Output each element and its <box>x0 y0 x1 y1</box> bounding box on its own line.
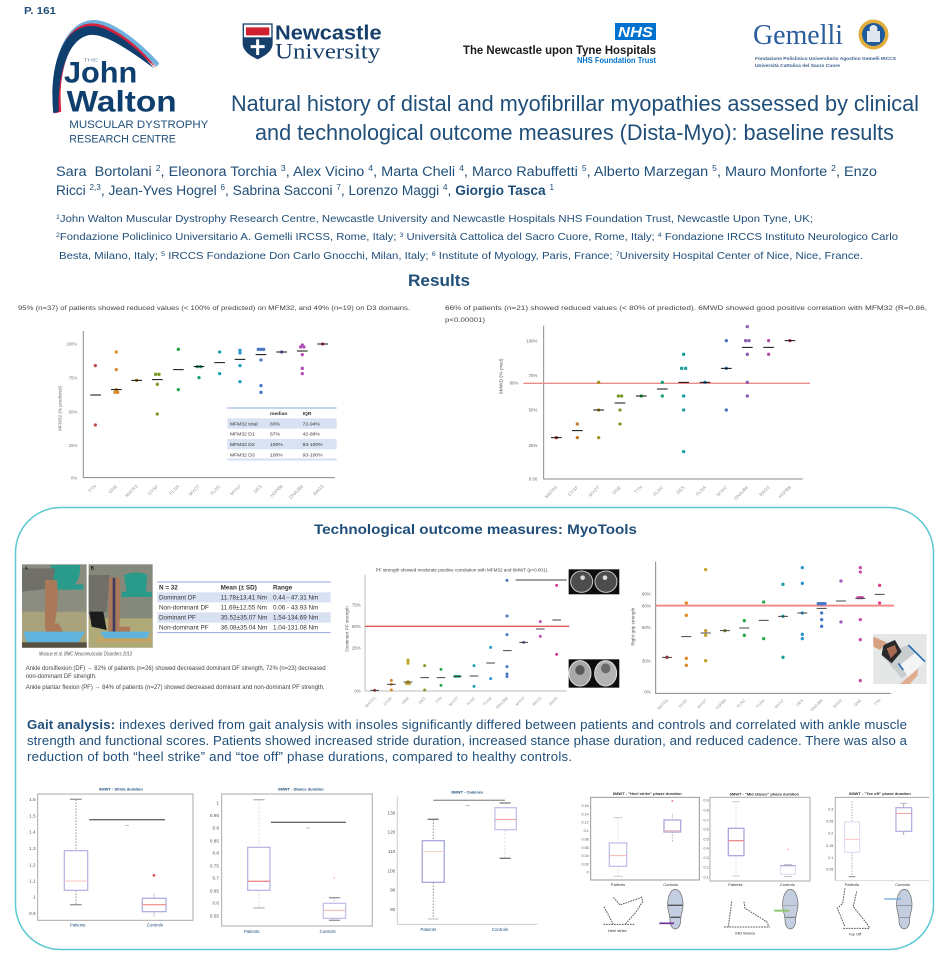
logo: John Walton Muscular Dystrophy Research Centre: RESEARCH CENTRE <box>69 133 176 145</box>
caption: photo source: Moraux et al. BMC Neuromuscular Disorders 2013 <box>39 652 132 658</box>
logo: Newcastle University <box>243 21 382 64</box>
chart: boxplot heel strike phase duration: Patients <box>611 882 625 887</box>
chart: boxplot toe off phase duration: 0.25 <box>826 819 833 823</box>
chart: grip strength by genotype: 80% <box>642 603 651 608</box>
chart: MFM32 percent predicted by genotype: FLNA <box>168 483 181 496</box>
chart: MFM32 percent predicted by genotype: 75% <box>69 375 77 380</box>
authors: , Alberto Marzegan <box>587 164 712 179</box>
chart: grip strength by genotype: TTN <box>873 698 882 707</box>
chart: boxplot stride duration: 1.1 <box>29 878 36 883</box>
table: ankle strength: Non-dominant DF <box>159 605 209 612</box>
authors: , Eleonora Torchia <box>161 164 281 179</box>
table: ankle strength: Dominant DF <box>159 595 196 602</box>
text: gait analysis: Gait analysis: indexes derived from gait analysis with insoles significantly differed between patients and controls and correlated with ankle muscle <box>27 717 907 732</box>
logo: John Walton Muscular Dystrophy Research Centre: John <box>64 56 137 89</box>
illustration: mid stance foot and insole <box>724 889 798 936</box>
chart: boxplot mid stance phase duration: Patients <box>728 882 743 887</box>
table: ankle strength: 11.69±12.55 Nm <box>221 605 267 612</box>
affiliations: 7 <box>616 251 620 258</box>
chart: dorsiflexion strength by genotype <box>344 567 569 710</box>
table: MFM32 median and IQR: median <box>270 411 287 417</box>
chart: MFM32 percent predicted by genotype: DNAJB6 <box>288 484 305 500</box>
chart: boxplot stride duration: 1.3 <box>29 846 36 851</box>
chart: boxplot cadence: 110 <box>388 849 396 854</box>
chart: boxplot stride duration: 6MWT - Stride duration <box>99 787 143 792</box>
chart: MFM32 percent predicted by genotype: FLNC <box>210 483 222 496</box>
text: gait analysis: strength and functional scores. Patients showed increased stride duration, increased stance phase duration, and reduced cadence. There was also a <box>27 733 908 748</box>
affiliations: 4 <box>658 232 662 239</box>
chart: MFM32 percent predicted by genotype: GNE <box>108 484 118 494</box>
chart: dorsiflexion strength by genotype: DYSF <box>382 695 394 707</box>
chart: grip strength by genotype <box>631 562 894 712</box>
table: ankle strength: Dominant PF <box>159 615 196 622</box>
chart: dorsiflexion strength by genotype: MATR3 <box>364 695 377 708</box>
chart: dorsiflexion strength by genotype: DES <box>417 695 427 705</box>
logo: John Walton Muscular Dystrophy Research Centre <box>52 20 208 145</box>
logo: The Newcastle upon Tyne Hospitals NHS: NHS <box>618 25 653 41</box>
logo: Gemelli: Gemelli <box>753 20 843 51</box>
affiliations: University Hospital Center of Nice, Nice, France. <box>620 250 863 262</box>
photo: handheld grip device <box>873 634 927 684</box>
authors: 2 <box>831 164 837 173</box>
chart: grip strength by genotype: DES <box>795 698 805 707</box>
chart: boxplot mid stance phase duration: Controls <box>780 882 795 887</box>
chart: boxplot stride duration: 0.9 <box>29 911 36 916</box>
chart: 6MWD percent predicted by genotype: 0.00 <box>529 477 538 482</box>
table: ankle strength: Non-dominant PF <box>159 625 209 632</box>
authors: Ricci <box>56 183 85 198</box>
authors: , Enzo <box>836 164 877 179</box>
chart: MFM32 percent predicted by genotype: BAG3 <box>312 484 325 496</box>
chart: boxplot mid stance phase duration: 0.5 <box>704 837 709 841</box>
chart: dorsiflexion strength by genotype: 75% <box>352 603 361 608</box>
text: 6MWD finding: 66% of patients (n=21) showed reduced values (< 80% of predicted). 6MWD showed good positive correlation with MFM32 (R=0.86, <box>445 305 927 312</box>
chart: boxplot stance duration <box>210 787 372 934</box>
chart: dorsiflexion strength by genotype: MYOT <box>448 695 460 707</box>
table: MFM32 median and IQR: 72-94% <box>303 421 320 427</box>
chart: boxplot cadence: 80 <box>390 907 396 912</box>
table: MFM32 median and IQR <box>227 408 337 461</box>
chart: boxplot toe off phase duration: 0.3 <box>828 807 833 811</box>
logo: Gemelli <box>753 20 896 68</box>
chart: boxplot stride duration: 1.4 <box>29 830 36 835</box>
chart: 6MWD percent predicted by genotype: 100% <box>526 338 537 343</box>
chart: MFM32 percent predicted by genotype: DES <box>253 484 263 494</box>
chart: boxplot heel strike phase duration: 0.02 <box>582 862 589 866</box>
chart: MFM32 percent predicted by genotype: 0% <box>71 475 77 480</box>
table: ankle strength: Mean (± SD) <box>221 584 257 591</box>
text: ankle strength findings: Ankle plantar flexion (PF) → 84% of patients (n=27) showed decreased dominant and non-dominant PF strength. <box>26 684 325 691</box>
affiliations: 1 <box>56 214 60 221</box>
chart: boxplot stance duration: 0.85 <box>210 838 219 843</box>
chart: 6MWD percent predicted by genotype <box>499 325 810 501</box>
chart: boxplot toe off phase duration: 0.15 <box>826 844 833 848</box>
chart: grip strength by genotype: HSPB8 <box>714 697 728 711</box>
chart: boxplot toe off phase duration: 0.2 <box>828 832 833 836</box>
authors: , Jean-Yves Hogrel <box>101 183 221 198</box>
affiliations: 3 <box>400 232 404 239</box>
chart: 6MWD percent predicted by genotype: GNE <box>611 485 622 495</box>
chart: dorsiflexion strength by genotype: DNAJB6 <box>495 695 510 710</box>
chart: MFM32 percent predicted by genotype <box>57 331 335 500</box>
authors: , Marta Cheli <box>373 164 459 179</box>
chart: 6MWD percent predicted by genotype: 80% <box>510 381 518 386</box>
chart: boxplot heel strike phase duration: Controls <box>663 882 678 887</box>
authors: 4 <box>459 164 465 173</box>
authors: Giorgio Tasca <box>455 183 549 198</box>
authors: 1 <box>549 183 555 192</box>
logo: The Newcastle upon Tyne Hospitals NHS: The Newcastle upon Tyne Hospitals <box>463 45 656 57</box>
logo: John Walton Muscular Dystrophy Research Centre: Walton <box>67 86 177 119</box>
chart: boxplot heel strike phase duration: 0.16 <box>582 804 589 808</box>
title: and technological outcome measures (Dista-Myo): baseline results <box>255 120 894 145</box>
logo: John Walton Muscular Dystrophy Research Centre: THE <box>83 57 99 63</box>
affiliations: Università Cattolica del Sacro Cuore, Rome, Italy; <box>403 231 658 243</box>
photo: ankle dorsiflexion setup A: A <box>25 566 29 571</box>
chart: dorsiflexion strength by genotype: 50% <box>352 624 361 629</box>
text: 6MWD finding <box>445 305 927 324</box>
affiliations: IRCCS Fondazione Don Carlo Gnocchi, Milan, Italy; <box>165 250 432 262</box>
chart: grip strength by genotype: DYSF <box>677 697 689 709</box>
chart: dorsiflexion strength by genotype: FLNA <box>482 695 493 706</box>
chart: boxplot cadence <box>388 789 538 932</box>
logo: The Newcastle upon Tyne Hospitals NHS: NHS Foundation Trust <box>577 56 656 65</box>
chart: grip strength by genotype: MYOT <box>696 697 708 710</box>
photo: ankle plantar flexion setup B <box>89 564 153 648</box>
text: 6MWD finding: p<0.00001) <box>445 317 485 324</box>
chart: boxplot stance duration: 0.75 <box>210 863 219 868</box>
table: ankle strength: 11.78±13.41 Nm <box>221 595 267 602</box>
chart: boxplot toe off phase duration: 0.05 <box>826 868 833 872</box>
chart: boxplot cadence: 130 <box>388 810 396 815</box>
table: ankle strength: 36.08±35.04 Nm <box>221 625 267 632</box>
table: MFM32 median and IQR: 93-100% <box>303 452 323 458</box>
photo: ankle plantar flexion setup B: B <box>91 566 95 571</box>
chart: boxplot heel strike phase duration: 0.04 <box>582 854 589 858</box>
chart: dorsiflexion strength by genotype: MYH7 <box>514 695 526 707</box>
chart: dorsiflexion strength by genotype: 25% <box>352 646 361 651</box>
table: ankle strength: 1.04-131.08 Nm <box>273 625 318 632</box>
text: MFM32 finding: 95% (n=37) of patients showed reduced values (< 100% of predicted) on MFM32, and 49% (n=19) on D3 domains. <box>18 305 410 312</box>
table: MFM32 median and IQR: MFM32 D3 <box>230 452 255 458</box>
table: ankle strength: Range <box>273 584 293 591</box>
text: ankle strength findings: non-dominant DF strength. <box>26 673 97 680</box>
chart: 6MWD percent predicted by genotype: 50% <box>529 408 537 413</box>
table: ankle strength: 35.52±35.07 Nm <box>221 615 267 622</box>
chart: grip strength by genotype: DNAJB6 <box>809 697 824 712</box>
logo: Newcastle University: Newcastle <box>275 21 382 44</box>
panel: technological outcome measures <box>16 508 934 950</box>
chart: boxplot mid stance phase duration: 0.3 <box>704 856 709 860</box>
chart: grip strength by genotype: FLNC <box>735 698 746 709</box>
chart: 6MWD percent predicted by genotype: MYH7 <box>716 485 729 498</box>
chart: MFM32 percent predicted by genotype: TTN <box>87 484 97 494</box>
authors: 5 <box>712 164 718 173</box>
heading: Technological outcome measures: Technological outcome measures: MyoTools <box>314 521 637 537</box>
authors: 6 <box>221 183 226 192</box>
authors: 4 <box>368 164 374 173</box>
chart: boxplot cadence: 100 <box>388 868 396 873</box>
image: thigh MRI, fatty replacement <box>569 659 619 688</box>
chart: boxplot stride duration: 1.6 <box>29 797 36 802</box>
affiliations: 5 <box>161 251 165 258</box>
table: ankle strength: 0.06 - 43.93 Nm <box>273 605 318 612</box>
chart: MFM32 percent predicted by genotype: MYH7 <box>229 484 242 497</box>
chart: boxplot stance duration: 1 <box>216 800 219 805</box>
chart: grip strength by genotype: GNE <box>853 698 863 707</box>
affiliations: 6 <box>432 251 436 258</box>
authors: 4 <box>443 183 448 192</box>
table: MFM32 median and IQR: IQR <box>303 411 312 417</box>
chart: boxplot cadence: 6MWT - Cadence <box>451 789 484 794</box>
image: thigh MRI, preserved muscle <box>569 569 619 594</box>
authors: , Mauro Monforte <box>717 164 831 179</box>
table: MFM32 median and IQR: MFM32 D1 <box>230 432 255 438</box>
chart: boxplot heel strike phase duration: 6MWT - "Heel strike" phase duration <box>613 791 682 796</box>
chart: boxplot cadence: 90 <box>390 888 396 893</box>
photo: ankle dorsiflexion setup A <box>22 564 87 648</box>
chart: grip strength by genotype: BAG3 <box>832 697 844 709</box>
chart: boxplot stance duration: 0.95 <box>210 813 219 818</box>
text: gait analysis: reduction of both “heel strike” and “toe off” phase durations, compared to healthy controls. <box>27 749 572 764</box>
chart: MFM32 percent predicted by genotype: MFM32 (% predicted) <box>57 385 62 431</box>
chart: MFM32 percent predicted by genotype: MYOT <box>188 484 201 497</box>
chart: boxplot mid stance phase duration: 0.6 <box>704 828 709 832</box>
authors: 3 <box>281 164 286 173</box>
chart: 6MWD percent predicted by genotype: FLNA <box>695 484 708 497</box>
chart: dorsiflexion strength by genotype: 0% <box>354 689 361 694</box>
chart: boxplot heel strike phase duration: 0.06 <box>582 846 589 850</box>
chart: 6MWD percent predicted by genotype: DES <box>675 485 686 495</box>
illustration: mid stance foot and insole: Mid Stance <box>735 931 756 936</box>
table: MFM32 median and IQR: 42-88% <box>303 432 320 438</box>
chart: 6MWD percent predicted by genotype: 6MWD (% pred) <box>499 358 505 394</box>
authors: 2,3 <box>90 183 101 192</box>
table: MFM32 median and IQR: MFM32 D2 <box>230 442 255 448</box>
poster page number: P. 161 <box>24 6 57 17</box>
table: ankle strength <box>157 582 331 633</box>
chart: 6MWD percent predicted by genotype: FLNC <box>652 484 665 497</box>
chart: grip strength by genotype: MYH7 <box>774 697 786 709</box>
chart: dorsiflexion strength by genotype: GNE <box>400 695 410 705</box>
heading: Results: Results <box>408 272 470 290</box>
chart: boxplot mid stance phase duration: 6MWT - "Mid stance" phase duration <box>730 791 800 796</box>
chart: grip strength by genotype: FLNA <box>755 698 766 709</box>
logo: John Walton Muscular Dystrophy Research Centre: MUSCULAR DYSTROPHY <box>69 119 208 131</box>
chart: boxplot stance duration: 6MWT - Stance duration <box>278 787 324 792</box>
text: ankle strength findings <box>26 665 326 691</box>
chart: grip strength by genotype: MATR3 <box>656 697 670 711</box>
affiliations: Fondazione Policlinico Universitario A. Gemelli IRCSS, Rome, Italy; <box>60 231 400 243</box>
chart: grip strength by genotype: Right grip strength <box>631 607 636 646</box>
chart: MFM32 percent predicted by genotype: 50% <box>69 409 77 414</box>
chart: boxplot stride duration: Patients <box>70 923 85 928</box>
authors: Sara Bortolani <box>56 164 145 179</box>
chart: boxplot stance duration: Controls <box>320 929 336 934</box>
logo: The Newcastle upon Tyne Hospitals NHS <box>463 23 656 65</box>
table: ankle strength: 0.44 - 47.31 Nm <box>273 595 318 602</box>
chart: MFM32 percent predicted by genotype: HSPB8 <box>269 484 284 498</box>
chart: boxplot heel strike phase duration: 0.1 <box>584 829 589 833</box>
chart: boxplot stance duration: 0.65 <box>210 888 219 893</box>
chart: 6MWD percent predicted by genotype: DNAJB6 <box>733 485 750 501</box>
chart: 6MWD percent predicted by genotype: MYOT <box>588 485 601 498</box>
chart: boxplot stance duration: 0.8 <box>212 851 219 856</box>
illustration: toe off foot and insole: Toe Off <box>849 931 862 936</box>
illustration: toe off foot and insole <box>837 888 912 936</box>
chart: 6MWD percent predicted by genotype: TTN <box>633 485 643 495</box>
logo: Gemelli: Fondazione Policlinico Universitario Agostino Gemelli IRCCS <box>755 56 896 61</box>
chart: boxplot stride duration: Controls <box>147 923 163 928</box>
table: MFM32 median and IQR: MFM32 total <box>230 421 258 427</box>
chart: boxplot heel strike phase duration: 0 <box>587 871 589 875</box>
chart: boxplot stance duration: 0.6 <box>212 901 219 906</box>
chart: boxplot heel strike phase duration: 0.08 <box>582 837 589 841</box>
chart: dorsiflexion strength by genotype: PF strength showed moderate positive correlation with MFM32 and 6MWT (p<0.001). <box>376 567 548 573</box>
table: ankle strength: 1.54-134.69 Nm <box>273 615 318 622</box>
chart: boxplot toe off phase duration: Controls <box>895 882 910 887</box>
chart: boxplot stride duration <box>29 787 193 928</box>
chart: boxplot stride duration: 1.2 <box>29 862 36 867</box>
chart: 6MWD percent predicted by genotype: MATR3 <box>544 485 559 499</box>
illustration: heel strike foot and insole: Heel strike <box>608 928 628 933</box>
authors: 5 <box>582 164 587 173</box>
affiliations: Besta, Milano, Italy; <box>59 250 151 262</box>
title <box>231 91 919 145</box>
affiliations: Institute of Myology, Paris, France; <box>436 250 616 262</box>
table: MFM32 median and IQR: 67% <box>270 432 281 438</box>
chart: grip strength by genotype: 0% <box>644 690 651 695</box>
chart: boxplot stance duration: 0.55 <box>210 913 219 918</box>
chart: grip strength by genotype: 60% <box>642 625 651 630</box>
logo: Gemelli: Università Cattolica del Sacro Cuore <box>755 63 841 68</box>
chart: boxplot toe off phase duration: Patients <box>845 882 859 887</box>
chart: boxplot mid stance phase duration: 0.4 <box>704 847 709 851</box>
chart: 6MWD percent predicted by genotype: 25% <box>529 443 537 448</box>
authors: , Alex Vicino <box>286 164 368 179</box>
affiliations <box>56 213 898 262</box>
chart: 6MWD percent predicted by genotype: HSPB8 <box>778 485 792 499</box>
table: MFM32 median and IQR: 93-100% <box>303 442 323 448</box>
authors: , Marco Rabuffetti <box>464 164 582 179</box>
chart: 6MWD percent predicted by genotype: DYSF <box>567 485 579 497</box>
chart: MFM32 percent predicted by genotype: 100% <box>66 342 77 347</box>
chart: boxplot toe off phase duration: 0.1 <box>828 856 833 860</box>
illustration: heel strike foot and insole <box>603 889 683 933</box>
chart: boxplot mid stance phase duration: 0.2 <box>704 866 709 870</box>
chart: dorsiflexion strength by genotype: BAG3 <box>531 695 543 707</box>
logo: Newcastle University: University <box>275 39 381 64</box>
chart: MFM32 percent predicted by genotype: MATR3 <box>124 484 139 498</box>
text: gait analysis <box>27 717 908 764</box>
chart: dorsiflexion strength by genotype: TTN <box>434 695 443 705</box>
chart: dorsiflexion strength by genotype: Dominant PF strength <box>344 606 349 652</box>
chart: boxplot mid stance phase duration: 0.7 <box>704 818 709 822</box>
chart: boxplot stance duration: 0.7 <box>212 876 219 881</box>
chart: boxplot mid stance phase duration: 0.9 <box>704 799 709 803</box>
authors: , Sabrina Sacconi <box>225 183 336 198</box>
chart: grip strength by genotype: 90% <box>642 591 651 596</box>
chart: dorsiflexion strength by genotype: ANO5 <box>547 695 559 707</box>
chart: MFM32 percent predicted by genotype: DYSF <box>147 484 159 496</box>
chart: boxplot stride duration: 1 <box>33 894 36 899</box>
chart: MFM32 percent predicted by genotype: 25% <box>69 443 77 448</box>
chart: boxplot heel strike phase duration: 0.14 <box>582 812 589 816</box>
chart: boxplot heel strike phase duration: 0.12 <box>582 821 589 825</box>
chart: boxplot cadence: 120 <box>388 830 396 835</box>
authors: , <box>448 183 455 198</box>
chart: boxplot cadence: Patients <box>420 927 436 932</box>
chart: boxplot stance duration: Patients <box>244 929 259 934</box>
affiliations: John Walton Muscular Dystrophy Research Centre, Newcastle University and Newcastle Hospitals NHS Foundation Trust, Newcastle Upon Tyne, UK; <box>60 213 813 225</box>
chart: grip strength by genotype: 30% <box>642 658 651 663</box>
chart: dorsiflexion strength by genotype: FLNC <box>465 695 476 706</box>
authors: 7 <box>336 183 341 192</box>
chart: boxplot toe off phase duration: 6MWT - "Toe off" phase duration <box>849 791 911 796</box>
table: ankle strength: N = 32 <box>159 584 178 591</box>
affiliations: Fondazione IRCCS Instituto Neurologico Carlo <box>662 231 898 243</box>
chart: boxplot cadence: Controls <box>492 927 508 932</box>
text: ankle strength findings: Ankle dorsiflexion (DF) → 82% of patients (n=26) showed decreased dominant DF strength, 72% (n=23) decreased <box>26 665 326 672</box>
authors: 2 <box>156 164 161 173</box>
title: Natural history of distal and myofibrillar myopathies assessed by clinical <box>231 91 919 116</box>
affiliations: 2 <box>56 232 60 239</box>
table: MFM32 median and IQR: 83% <box>270 421 281 427</box>
chart: boxplot stride duration: 1.5 <box>29 813 36 818</box>
table: MFM32 median and IQR: 100% <box>270 452 283 458</box>
chart: boxplot toe off phase duration <box>826 791 929 887</box>
table: MFM32 median and IQR: 100% <box>270 442 283 448</box>
chart: boxplot mid stance phase duration: 0.8 <box>704 809 709 813</box>
chart: 6MWD percent predicted by genotype: BAG3 <box>758 485 771 497</box>
chart: 6MWD percent predicted by genotype: 75% <box>529 373 537 378</box>
chart: boxplot heel strike phase duration <box>582 791 699 887</box>
chart: boxplot mid stance phase duration <box>704 791 810 887</box>
chart: boxplot mid stance phase duration: 0.1 <box>704 875 709 879</box>
authors: , Lorenzo Maggi <box>341 183 443 198</box>
chart: boxplot stance duration: 0.9 <box>212 826 219 831</box>
authors <box>56 164 877 198</box>
